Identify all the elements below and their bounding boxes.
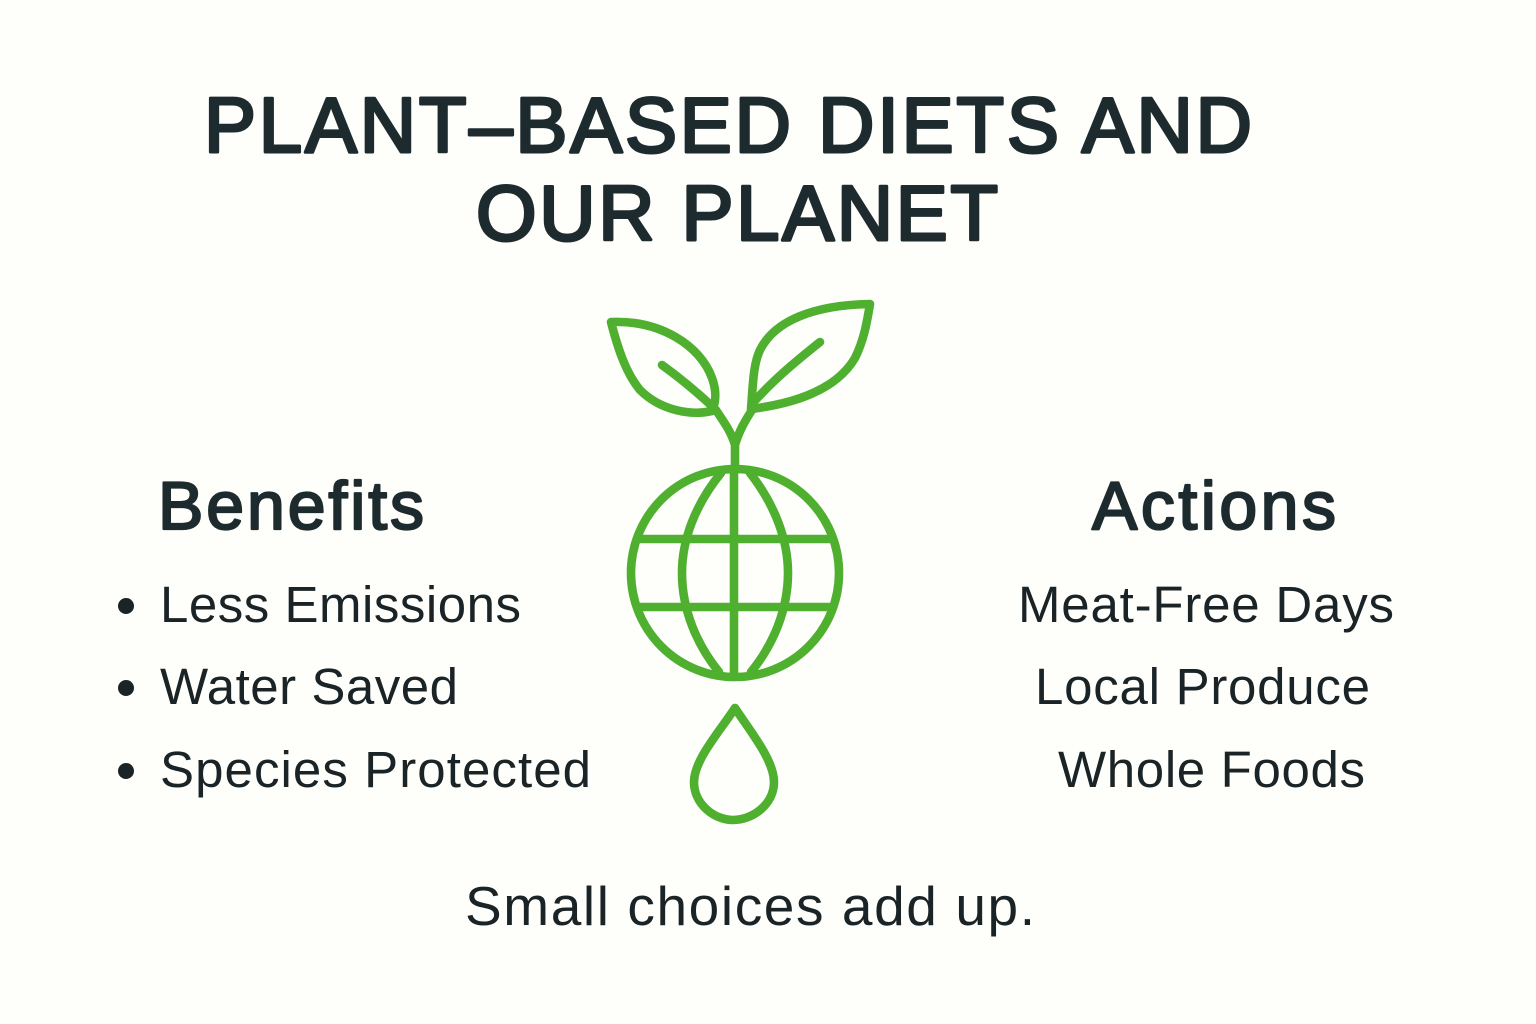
- icon: sprout, globe and water drop: [611, 304, 870, 820]
- list item: water saved: Water Saved: [160, 658, 458, 715]
- panel: actions: [1018, 468, 1394, 798]
- list item: less emissions: Less Emissions: [160, 576, 521, 633]
- icon: water drop: [694, 708, 774, 820]
- list item: meat-free days: Meat-Free Days: [1018, 576, 1394, 633]
- title: PLANT–BASED DIETS AND: [204, 81, 1252, 169]
- icon: sprout: [611, 304, 870, 468]
- list item: species protected: Species Protected: [160, 741, 591, 798]
- panel: benefits: [118, 468, 591, 798]
- heading: actions: Actions: [1092, 468, 1336, 544]
- title: OUR PLANET: [476, 169, 998, 257]
- closing tagline: Small choices add up.: [465, 875, 1035, 937]
- heading: benefits: Benefits: [158, 468, 424, 544]
- list item: local produce: Local Produce: [1035, 658, 1370, 715]
- title: [204, 81, 1252, 257]
- list item: whole foods: Whole Foods: [1058, 741, 1365, 798]
- icon: globe: [631, 468, 839, 677]
